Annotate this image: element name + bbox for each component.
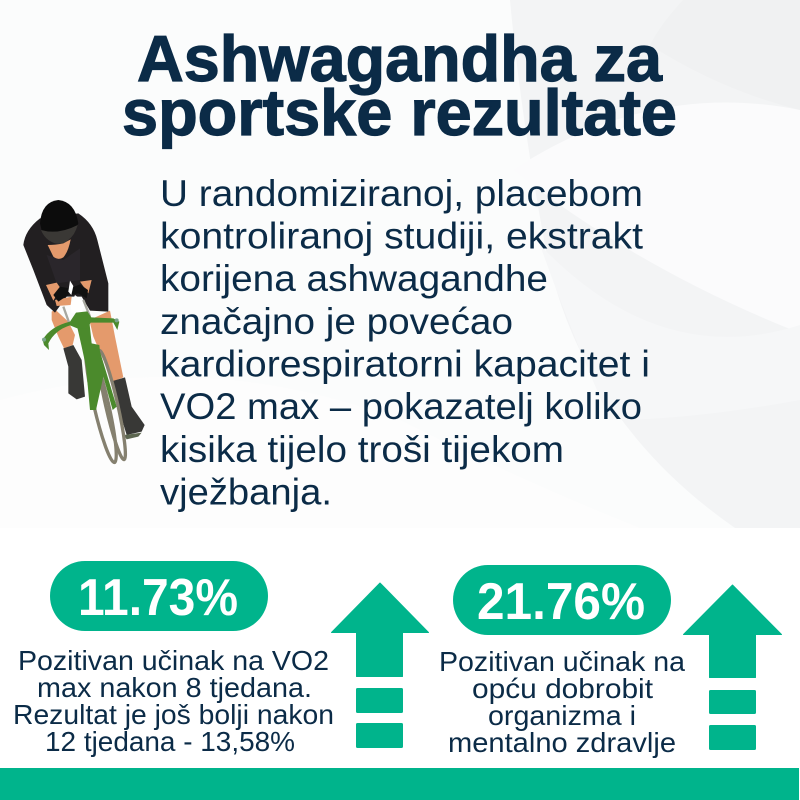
body text: VO2 max – pokazatelj koliko — [160, 385, 642, 427]
bicycle frame — [76, 322, 117, 410]
left leg — [52, 309, 75, 348]
body text: kontroliranoj studiji, ekstrakt — [160, 214, 644, 256]
title: Ashwagandha za — [137, 22, 663, 95]
stat pill: 21.76% — [453, 565, 671, 635]
aero bar brackets — [63, 300, 90, 323]
body text: korijena ashwagandhe — [160, 257, 548, 299]
title: sportske rezultate — [122, 76, 677, 149]
text block: general wellbeing: Pozitivan učinak na — [439, 646, 685, 677]
background panel — [0, 0, 800, 528]
handlebar — [43, 311, 119, 350]
helmet — [40, 200, 78, 232]
icon: arrow up right — [684, 585, 782, 750]
icon: cyclist — [23, 200, 145, 464]
stat pill: 11.73% — [50, 561, 268, 631]
text block: VO2 effect: Pozitivan učinak na VO2 — [18, 645, 329, 676]
arms and hands — [46, 283, 61, 301]
text block: VO2 effect: max nakon 8 tjedana. — [37, 672, 312, 703]
text block: VO2 effect: Rezultat je još bolji nakon — [13, 699, 334, 730]
right leg — [89, 311, 123, 382]
text block: general wellbeing: organizma i — [488, 700, 636, 731]
stat pill: 11.73%: 11.73% — [78, 569, 238, 627]
text block: general wellbeing: mentalno zdravlje — [448, 727, 676, 758]
body text: vježbanja. — [160, 470, 332, 512]
body text — [160, 172, 650, 512]
body text: U randomiziranoj, placebom — [160, 172, 643, 214]
text block: VO2 effect — [13, 645, 334, 757]
stat pill: 21.76%: 21.76% — [477, 573, 645, 631]
footer bar — [0, 768, 799, 800]
text block: VO2 effect: 12 tjedana - 13,58% — [45, 726, 295, 757]
title — [122, 22, 677, 149]
text block: general wellbeing — [439, 646, 685, 758]
torso — [23, 213, 108, 313]
icon: arrow up left — [332, 583, 428, 748]
body text: kardiorespiratorni kapacitet i — [160, 342, 650, 384]
text block: general wellbeing: opću dobrobit — [472, 673, 653, 704]
bicycle wheels — [80, 344, 130, 464]
body text: kisika tijelo troši tijekom — [160, 428, 564, 470]
body text: značajno je povećao — [160, 300, 513, 342]
